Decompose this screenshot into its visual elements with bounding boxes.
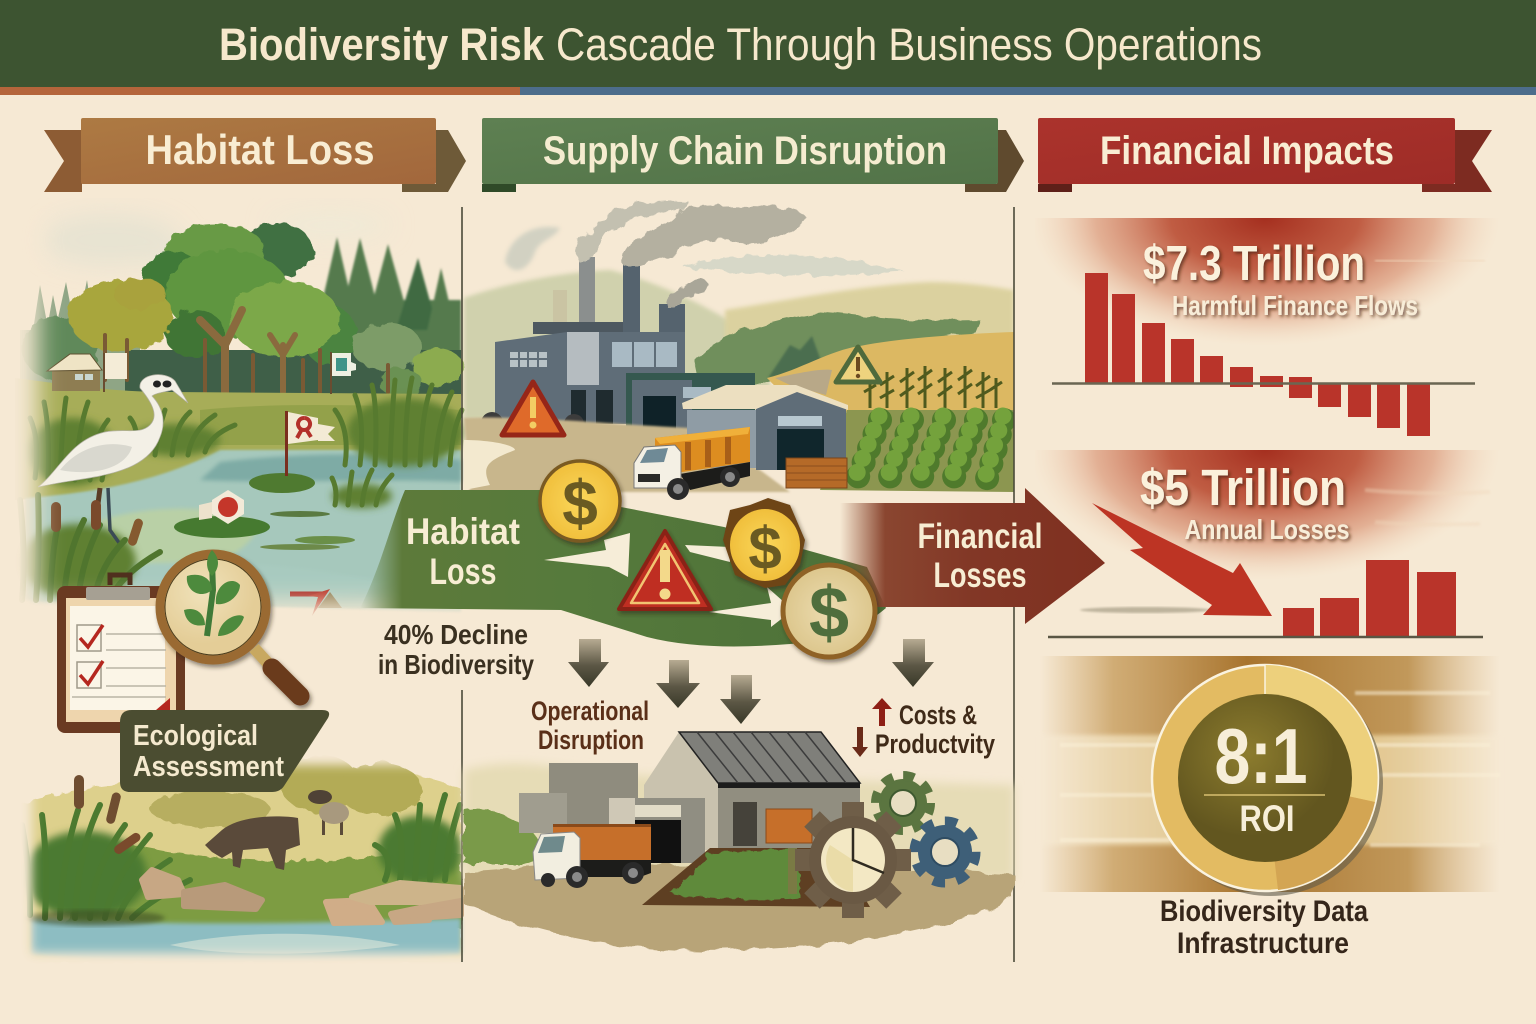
- far pines left: [20, 280, 140, 395]
- icon: clock gear: [795, 802, 911, 918]
- left plume: [505, 227, 560, 270]
- arrow: Financial Losses: [840, 488, 1105, 624]
- text: 40% Decline in Biodiversity: [378, 619, 534, 680]
- marker flag: [249, 411, 335, 493]
- rubble: [775, 370, 832, 395]
- text: Costs and Productivity: Productvity: [875, 729, 995, 759]
- reed clump bases: [20, 398, 463, 600]
- ground: [464, 864, 1014, 951]
- icon: dollar coin 2: [723, 498, 805, 588]
- crates: [786, 458, 847, 488]
- divider lines: [462, 207, 1014, 962]
- reeds lower left: [22, 795, 460, 918]
- background haze: [464, 764, 1014, 880]
- ribbon: Habitat Loss: [44, 118, 466, 192]
- callout: Ecological Assessment: Assessment: [133, 751, 284, 783]
- text: 40% Decline in Biodiversity: in Biodiversity: [378, 649, 534, 680]
- rocks: [142, 870, 461, 923]
- text: 40% Decline in Biodiversity: 40% Decline: [384, 619, 528, 650]
- text: Costs and Productivity: [852, 698, 995, 759]
- medallion: [1152, 665, 1383, 896]
- title banner: [0, 0, 1536, 95]
- text: Operational Disruption: Disruption: [538, 725, 644, 755]
- icon: hut and signs: [47, 352, 356, 394]
- bar chart: [1283, 560, 1456, 638]
- reed clumps: [30, 378, 462, 505]
- icon: egret: [38, 375, 188, 547]
- arrow: Financial Losses: Losses: [934, 556, 1026, 595]
- icon: dollar coin 1: $: [562, 467, 598, 539]
- icon: blue gear: [915, 822, 975, 882]
- trend arrow: [1092, 503, 1272, 616]
- bushes: [150, 756, 422, 827]
- water: [25, 450, 461, 612]
- panel: habitat scene lower: [20, 756, 462, 964]
- ROI label: ROI: [1240, 798, 1294, 839]
- icon: clipboard checklist: [57, 575, 185, 733]
- factory: [495, 257, 755, 431]
- panel: factory scene: [464, 201, 1014, 492]
- text: Biodiversity Data Infrastructure: [1160, 895, 1368, 960]
- ribbon: Supply Chain Disruption: [482, 118, 1024, 192]
- text: Biodiversity Data Infrastructure: Biodiversity Data: [1160, 895, 1368, 928]
- icon: dollar coin 1: [540, 461, 620, 541]
- water: [30, 918, 461, 962]
- garage block: [609, 798, 705, 863]
- crop field: [820, 410, 1014, 492]
- icon: warning triangle centre: [619, 531, 711, 609]
- flow: green cascade arrow: [360, 490, 886, 646]
- icon: magnifying glass with leaf: [160, 550, 300, 696]
- stat label: Annual Losses: [1184, 514, 1350, 545]
- callout: Ecological Assessment: Ecological: [133, 720, 258, 752]
- title text: Cascade Through Business Operations: [556, 19, 1262, 70]
- stat label: Harmful Finance Flows: [1172, 290, 1418, 321]
- small red arrow marker: [290, 589, 342, 616]
- stat value: $7.3 Trillion: [1143, 237, 1365, 291]
- icon: wheels behind warning: [482, 412, 584, 422]
- icon: dollar coin 3: [783, 565, 875, 657]
- bar chart: [1085, 273, 1430, 436]
- smoke plumes: [576, 201, 905, 307]
- green grass: [60, 844, 461, 929]
- hills: [464, 270, 1014, 420]
- arrow: Financial Losses: Financial: [918, 517, 1042, 556]
- ribbon label: Habitat Loss: [146, 126, 374, 173]
- flow arrow two: [685, 545, 730, 562]
- lily pads and marker: [174, 490, 355, 550]
- flow arrow one: [544, 533, 630, 577]
- callout: Ecological Assessment: [120, 710, 329, 792]
- pines right: [315, 237, 461, 395]
- icon: warning triangle left: [502, 382, 564, 435]
- corn rows: [864, 366, 1002, 408]
- checkbox two: [77, 661, 103, 688]
- ground: [464, 417, 790, 492]
- icon: warning sign on hill: [836, 347, 880, 382]
- flow label: Habitat: [406, 511, 520, 552]
- text: Costs and Productivity: Costs &: [899, 700, 977, 730]
- flow: green cascade arrow: Loss: [430, 551, 496, 592]
- icon: small sheep: [308, 790, 349, 835]
- forest canopy: [22, 223, 464, 396]
- sky and clouds: [51, 216, 172, 264]
- panel: habitat scene upper: [15, 211, 464, 616]
- flow arrow three: [709, 587, 793, 627]
- icon: orange truck: [533, 824, 651, 888]
- ribbon: Financial Impacts: [1038, 118, 1492, 192]
- warehouse: [682, 385, 848, 470]
- gold field: [767, 332, 1014, 412]
- title text: Biodiversity Risk: [219, 19, 545, 70]
- arrow shadow: [1080, 607, 1210, 613]
- ratio: 8:1: [1214, 712, 1308, 800]
- bush: [464, 808, 539, 864]
- dark reed base: [25, 910, 165, 926]
- text: Biodiversity Data Infrastructure: Infrastructure: [1177, 927, 1349, 960]
- ribbon label: Financial Impacts: [1100, 129, 1394, 173]
- panel: ROI medallion: [1040, 656, 1500, 896]
- icon: green gear: [876, 776, 930, 830]
- grey buildings: [549, 763, 638, 828]
- farmhouse: [644, 732, 860, 850]
- text: Operational Disruption: Operational: [531, 696, 649, 726]
- panel: $5 Trillion chart: [1035, 450, 1505, 638]
- arrows: downward flow: [568, 639, 934, 724]
- icon: yellow truck: [634, 427, 750, 500]
- cattails left: [20, 495, 160, 600]
- icon: grazing animal: [205, 816, 300, 870]
- reed bases: [23, 816, 462, 919]
- dark treeline backdrop: [125, 350, 461, 394]
- cattail heads: [74, 775, 142, 856]
- mound with plants: [642, 848, 870, 907]
- icon: dollar coin 3: $: [809, 573, 849, 653]
- icon: dollar coin 2: $: [748, 515, 782, 582]
- panel: $7.3 Trillion chart: [1035, 218, 1505, 436]
- checkbox one: [77, 625, 103, 651]
- panel: operations scene: [464, 732, 1014, 951]
- text: Operational Disruption: [531, 696, 649, 755]
- stat value: $5 Trillion: [1140, 459, 1346, 516]
- tree trunks: [105, 310, 388, 392]
- ribbon label: Supply Chain Disruption: [543, 129, 947, 173]
- meadow: [15, 378, 461, 500]
- pines: [768, 336, 820, 378]
